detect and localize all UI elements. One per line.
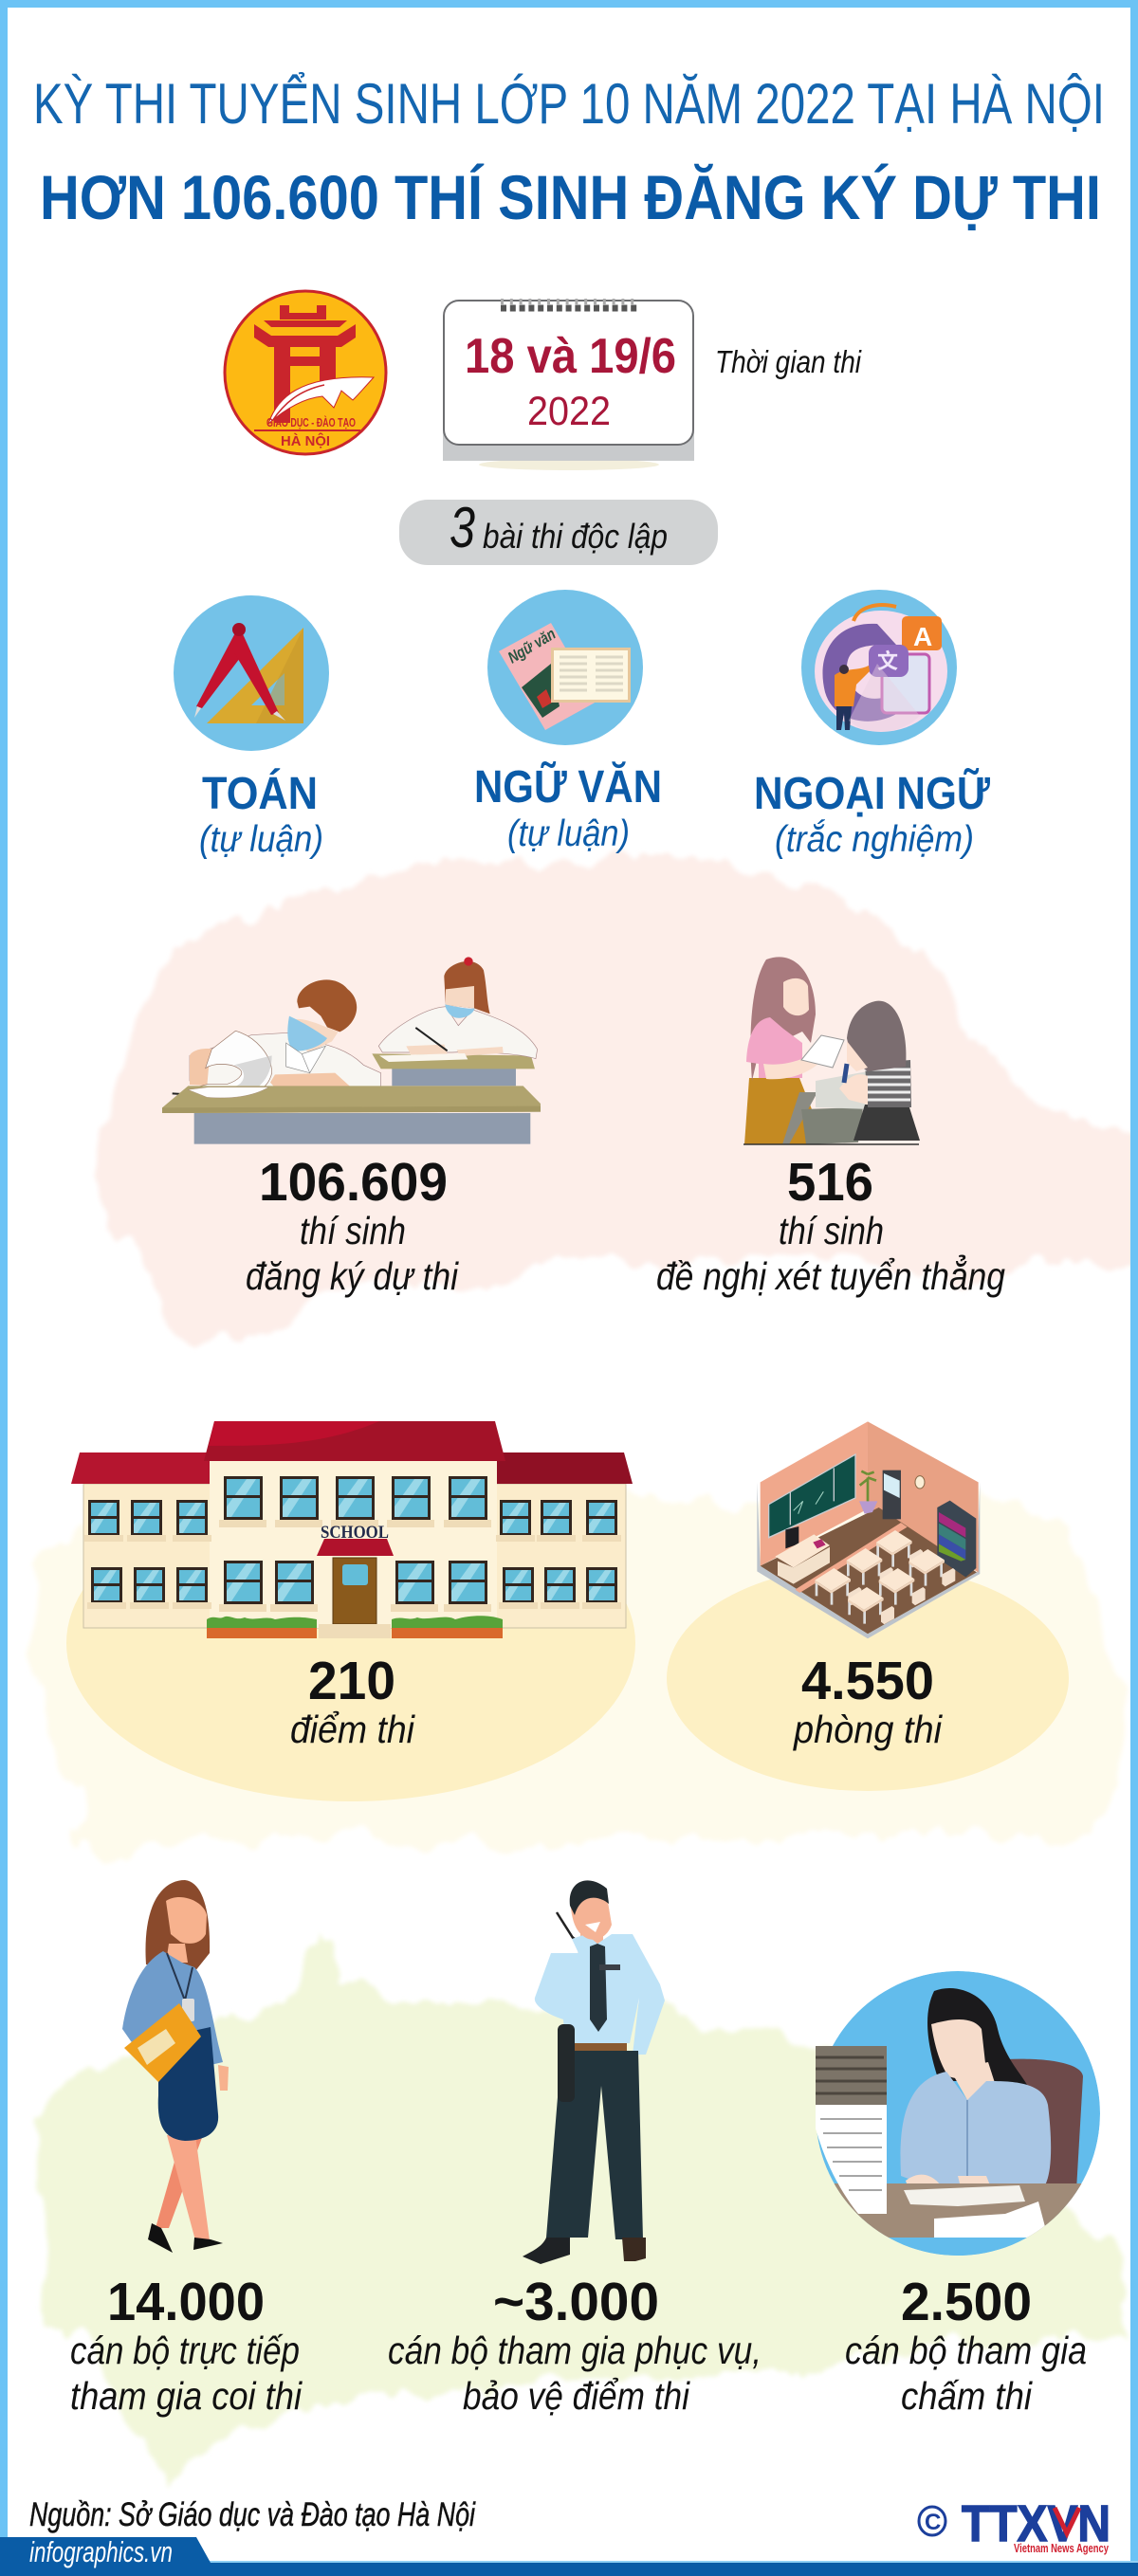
girl student <box>378 957 538 1062</box>
illustration: school building: SCHOOL <box>321 1523 389 1543</box>
stat: 2.500: 2.500 <box>901 2272 1032 2332</box>
footer bar with site tab <box>0 2535 1138 2576</box>
text: language format: (trắc nghiệm) <box>775 819 974 860</box>
pink watercolor wash <box>85 853 1138 1346</box>
logo: TTXVN: TTXVN <box>962 2495 1110 2552</box>
yellow watercolor wash <box>33 1479 1124 1858</box>
text: invigilators line 2: tham gia coi thi <box>70 2374 303 2418</box>
green watercolor wash <box>38 1925 1119 2494</box>
back desk <box>372 1053 535 1086</box>
panel: math subject <box>174 595 329 860</box>
stat: 210: 210 <box>308 1651 395 1711</box>
illustration: security guard with radio <box>523 1880 665 2264</box>
text: candidates: thí sinh <box>779 1209 884 1252</box>
icon: compass and set square <box>174 595 329 751</box>
illustration: isometric classroom <box>757 1421 980 1638</box>
text: invigilators line 1: cán bộ trực tiếp <box>70 2329 300 2372</box>
panel: registered candidates <box>162 957 541 1298</box>
front desk <box>162 1086 541 1144</box>
panel: exam rooms <box>667 1421 1069 1791</box>
calendar: exam date: 18 và 19/6 <box>465 329 676 384</box>
icon: Hanoi education department logo: HÀ NỘI <box>281 432 330 449</box>
icon: Hanoi education department logo <box>225 291 386 454</box>
text: exam sites: điểm thi <box>290 1708 416 1751</box>
logo: TTXVN: C <box>925 2510 941 2535</box>
ellipse background <box>66 1485 635 1801</box>
panel: invigilators <box>70 1880 303 2418</box>
panel: direct admission candidates <box>656 957 1005 1298</box>
illustration: students at desks <box>162 957 541 1144</box>
text: graders line 1: cán bộ tham gia <box>845 2329 1087 2372</box>
panel: foreign language subject <box>754 590 990 860</box>
text: security line 1: cán bộ tham gia phục vụ, <box>388 2329 762 2372</box>
panel: literature subject <box>474 590 662 854</box>
text: security line 2: bảo vệ điểm thi <box>463 2374 691 2418</box>
illustration: woman with folder <box>122 1880 229 2253</box>
text: graders line 2: chấm thi <box>901 2374 1034 2418</box>
ellipse background <box>667 1565 1069 1791</box>
stat: approximately 3.000: ~3.000 <box>493 2272 659 2332</box>
panel: exam sites <box>66 1421 635 1801</box>
panel: security staff <box>388 1880 762 2418</box>
stat: 14.000: 14.000 <box>107 2272 265 2332</box>
illustration: school building <box>71 1421 633 1638</box>
stat: 106.609: 106.609 <box>259 1152 448 1213</box>
illustration: two girls with papers <box>743 957 920 1144</box>
text: math format: (tự luận) <box>199 819 323 860</box>
text: exam time label: Thời gian thi <box>715 344 862 379</box>
calendar: exam date <box>443 301 694 470</box>
stat: 516: 516 <box>787 1152 873 1213</box>
text: source: Nguồn: Sở Giáo dục và Đào tạo Hà Nội <box>29 2496 476 2533</box>
icon: Hanoi education department logo: GIÁO DỤC - ĐÀO TẠO <box>266 415 356 429</box>
boy student <box>173 979 381 1098</box>
pill: 3 independent exams <box>399 496 718 565</box>
logo: TTXVN <box>919 2495 1110 2555</box>
icon: foreign language translation <box>801 590 957 745</box>
text: math name: TOÁN <box>202 768 318 819</box>
panel: exam graders <box>806 1971 1114 2418</box>
text: candidates: thí sinh <box>300 1209 406 1252</box>
icon: literature books <box>487 590 643 745</box>
calendar: exam date: 2022 <box>527 389 611 434</box>
text: exam rooms: phòng thi <box>792 1708 944 1751</box>
pill: 3 independent exams: bài thi độc lập <box>483 517 668 556</box>
text: language name: NGOẠI NGỮ <box>754 767 990 819</box>
text: literature format: (tự luận) <box>507 813 630 854</box>
pill: 3 independent exams: 3 <box>450 496 475 559</box>
icon: literature books: Ngữ văn <box>505 625 559 667</box>
icon: foreign language translation: 文 <box>877 649 898 673</box>
illustration: woman grading papers <box>816 1971 1100 2256</box>
text: direct admission: đề nghị xét tuyển thẳng <box>656 1254 1005 1298</box>
text: registered: đăng ký dự thi <box>246 1254 460 1298</box>
stat: 4.550: 4.550 <box>801 1651 934 1711</box>
icon: foreign language translation: A <box>913 622 932 651</box>
text: website: infographics.vn <box>29 2535 173 2568</box>
text: literature name: NGỮ VĂN <box>474 760 662 813</box>
